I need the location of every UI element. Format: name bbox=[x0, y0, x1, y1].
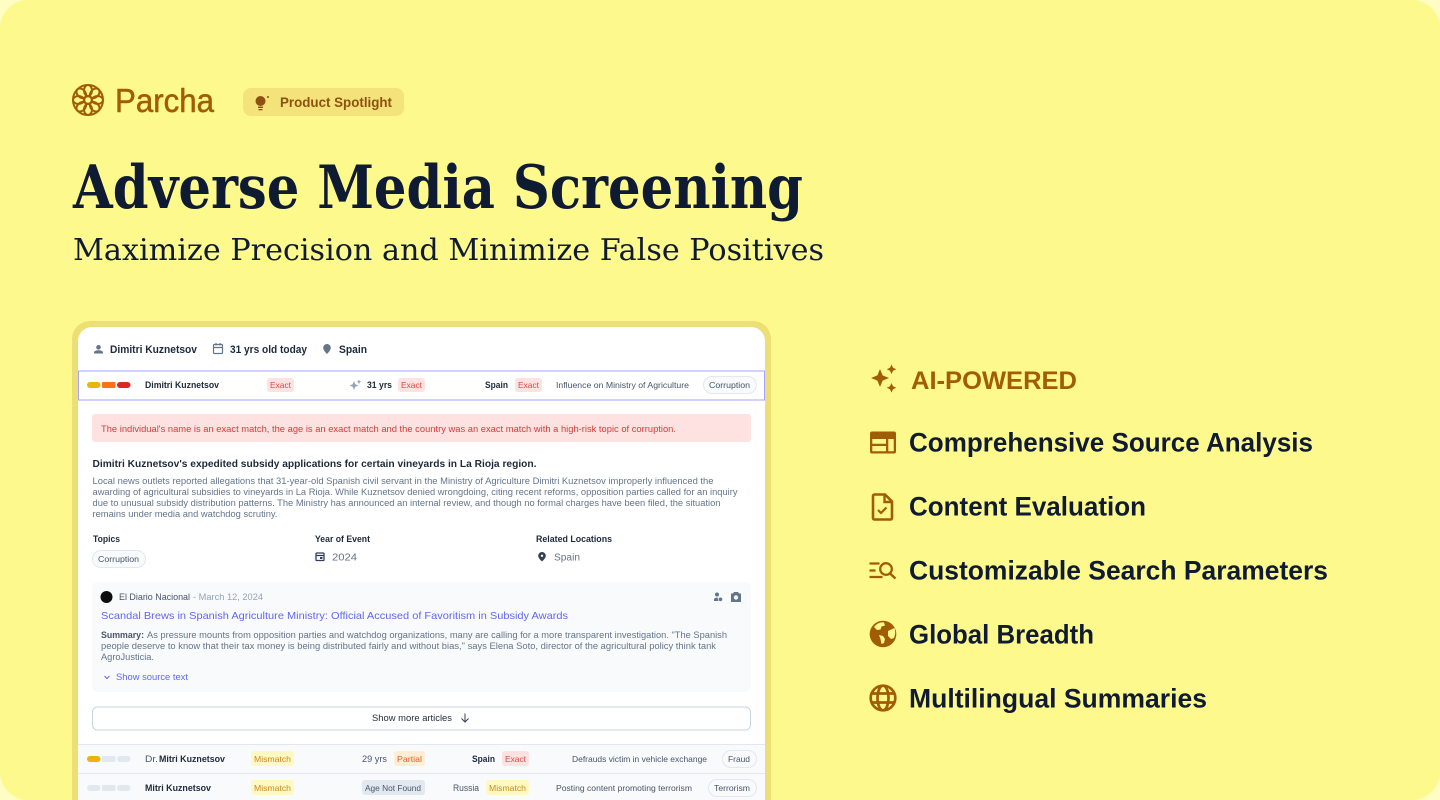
article summary text bbox=[92, 458, 738, 519]
selected result row: Corruption bbox=[709, 380, 750, 390]
selected result row bbox=[78, 371, 764, 400]
result row: Mitri Kuznetsov: Mismatch bbox=[489, 783, 526, 793]
source article box: Show source text bbox=[116, 672, 189, 682]
metadata: related locations: Related Locations bbox=[536, 534, 612, 544]
icon: chevron bbox=[104, 676, 110, 678]
selected result row: 31 yrs bbox=[367, 380, 392, 390]
result row: Dr. Mitri Kuznetsov: 29 yrs bbox=[362, 754, 388, 764]
profile header row: Dimitri Kuznetsov bbox=[110, 344, 198, 356]
brand name: Parcha bbox=[115, 82, 215, 119]
show more articles button bbox=[92, 707, 750, 730]
icon: location pin bbox=[323, 344, 331, 354]
article summary text: due to unusual subsidy distribution patterns. The Ministry has announced an internal review, and though no formal charges have been filed, the situation bbox=[92, 498, 721, 508]
badge: product spotlight: Product Spotlight bbox=[280, 94, 392, 110]
metadata: topics: Topics bbox=[93, 534, 120, 544]
alert banner bbox=[92, 414, 751, 442]
source article box bbox=[92, 582, 751, 692]
result row: Mitri Kuznetsov: Mismatch bbox=[254, 783, 291, 793]
feature: global breadth: Global Breadth bbox=[909, 620, 1094, 650]
result row: Mitri Kuznetsov: Posting content promoting terrorism bbox=[556, 783, 692, 793]
article summary text: Local news outlets reported allegations that 31-year-old Spanish civil servant in the Ministry of Agriculture Dimitri Kuznetsov improperly influenced the bbox=[92, 476, 713, 486]
selected result row: Exact bbox=[401, 380, 423, 390]
result row: Dr. Mitri Kuznetsov: Fraud bbox=[728, 754, 750, 764]
result row: Dr. Mitri Kuznetsov: Mitri Kuznetsov bbox=[159, 754, 225, 764]
profile header row: Spain bbox=[339, 344, 367, 356]
icon: sparkle bbox=[350, 380, 361, 390]
alert banner: The individual's name is an exact match, the age is an exact match and the country was an exact match with a high-risk topic of corruption. bbox=[101, 424, 676, 435]
icon: person search bbox=[714, 592, 722, 601]
icon: Parcha flower logo bbox=[73, 85, 103, 115]
result row: Dr. Mitri Kuznetsov bbox=[78, 744, 765, 774]
result row: Mitri Kuznetsov: Terrorism bbox=[714, 783, 750, 793]
result row: Mitri Kuznetsov: Russia bbox=[453, 783, 479, 793]
metadata: related locations: Spain bbox=[554, 552, 580, 564]
feature: content evaluation: Content Evaluation bbox=[909, 492, 1146, 522]
metadata: topics bbox=[92, 534, 146, 568]
result row: Dr. Mitri Kuznetsov: Dr. bbox=[145, 754, 158, 764]
feature list bbox=[870, 364, 1328, 714]
result row: Dr. Mitri Kuznetsov: Defrauds victim in vehicle exchange bbox=[572, 754, 707, 764]
title: Adverse Media Screening bbox=[72, 153, 803, 223]
result row: Mitri Kuznetsov: Mitri Kuznetsov bbox=[145, 783, 211, 793]
source article box: As pressure mounts from opposition parties and watchdog organizations, many are calling for a more transparent investigation. "The Spanish bbox=[147, 630, 727, 640]
selected result row: Exact bbox=[518, 380, 540, 390]
metadata: topics: Corruption bbox=[98, 554, 139, 564]
source article box: people deserve to know that their tax money is being distributed fairly and without bias," says Elena Soto, director of the agricultural policy think tank bbox=[101, 641, 717, 651]
result row: Dr. Mitri Kuznetsov: Partial bbox=[397, 754, 422, 764]
badge: product spotlight bbox=[243, 88, 404, 116]
metadata: related locations bbox=[536, 534, 612, 564]
brand header bbox=[73, 82, 404, 119]
feature: customizable search parameters: Customizable Search Parameters bbox=[909, 556, 1328, 586]
result row: Dr. Mitri Kuznetsov: Spain bbox=[472, 754, 495, 764]
article summary text: Dimitri Kuznetsov's expedited subsidy applications for certain vineyards in La Rioja region. bbox=[92, 458, 537, 470]
source article box: Summary: bbox=[101, 630, 144, 640]
icon: person bbox=[94, 345, 103, 354]
icon: publisher avatar bbox=[100, 591, 112, 603]
profile header row: 31 yrs old today bbox=[230, 344, 308, 356]
metadata: year of event bbox=[315, 534, 370, 564]
selected result row: Exact bbox=[270, 380, 292, 390]
icon: down arrow bbox=[462, 714, 468, 722]
metadata: year of event: Year of Event bbox=[315, 534, 370, 544]
article summary text: awarding of agricultural subsidies to vineyards in La Rioja. While Kuznetsov denied wrongdoing, citing recent reforms, opposition parties called for an inquiry bbox=[92, 487, 738, 497]
subtitle: Maximize Precision and Minimize False Positives bbox=[73, 233, 824, 268]
profile header row bbox=[94, 343, 367, 356]
icon: camera bbox=[731, 592, 741, 602]
source article box: Scandal Brews in Spanish Agriculture Ministry: Official Accused of Favoritism in Subsidy Awards bbox=[101, 610, 568, 622]
panel: product screenshot card bbox=[72, 321, 771, 800]
result row: Mitri Kuznetsov: Age Not Found bbox=[365, 783, 421, 793]
result row: Mitri Kuznetsov bbox=[78, 774, 765, 800]
selected result row: Influence on Ministry of Agriculture bbox=[556, 380, 689, 390]
icon: calendar bbox=[214, 343, 222, 354]
source article box: AgroJusticia. bbox=[101, 652, 154, 662]
source article box: - March 12, 2024 bbox=[193, 592, 263, 602]
result row: Dr. Mitri Kuznetsov: Mismatch bbox=[254, 754, 291, 764]
feature: multilingual summaries: Multilingual Summaries bbox=[909, 684, 1207, 714]
selected result row: Spain bbox=[485, 380, 508, 390]
source article box: El Diario Nacional bbox=[119, 592, 190, 602]
selected result row: Dimitri Kuznetsov bbox=[145, 380, 219, 390]
risk bars bbox=[87, 382, 130, 388]
metadata: year of event: 2024 bbox=[332, 552, 357, 564]
show more articles button: Show more articles bbox=[372, 713, 452, 724]
feature: AI-powered: AI-POWERED bbox=[911, 367, 1077, 395]
article summary text: remains under media and watchdog scrutiny. bbox=[92, 509, 278, 519]
feature: comprehensive source analysis: Comprehensive Source Analysis bbox=[909, 428, 1313, 458]
result row: Dr. Mitri Kuznetsov: Exact bbox=[505, 754, 527, 764]
